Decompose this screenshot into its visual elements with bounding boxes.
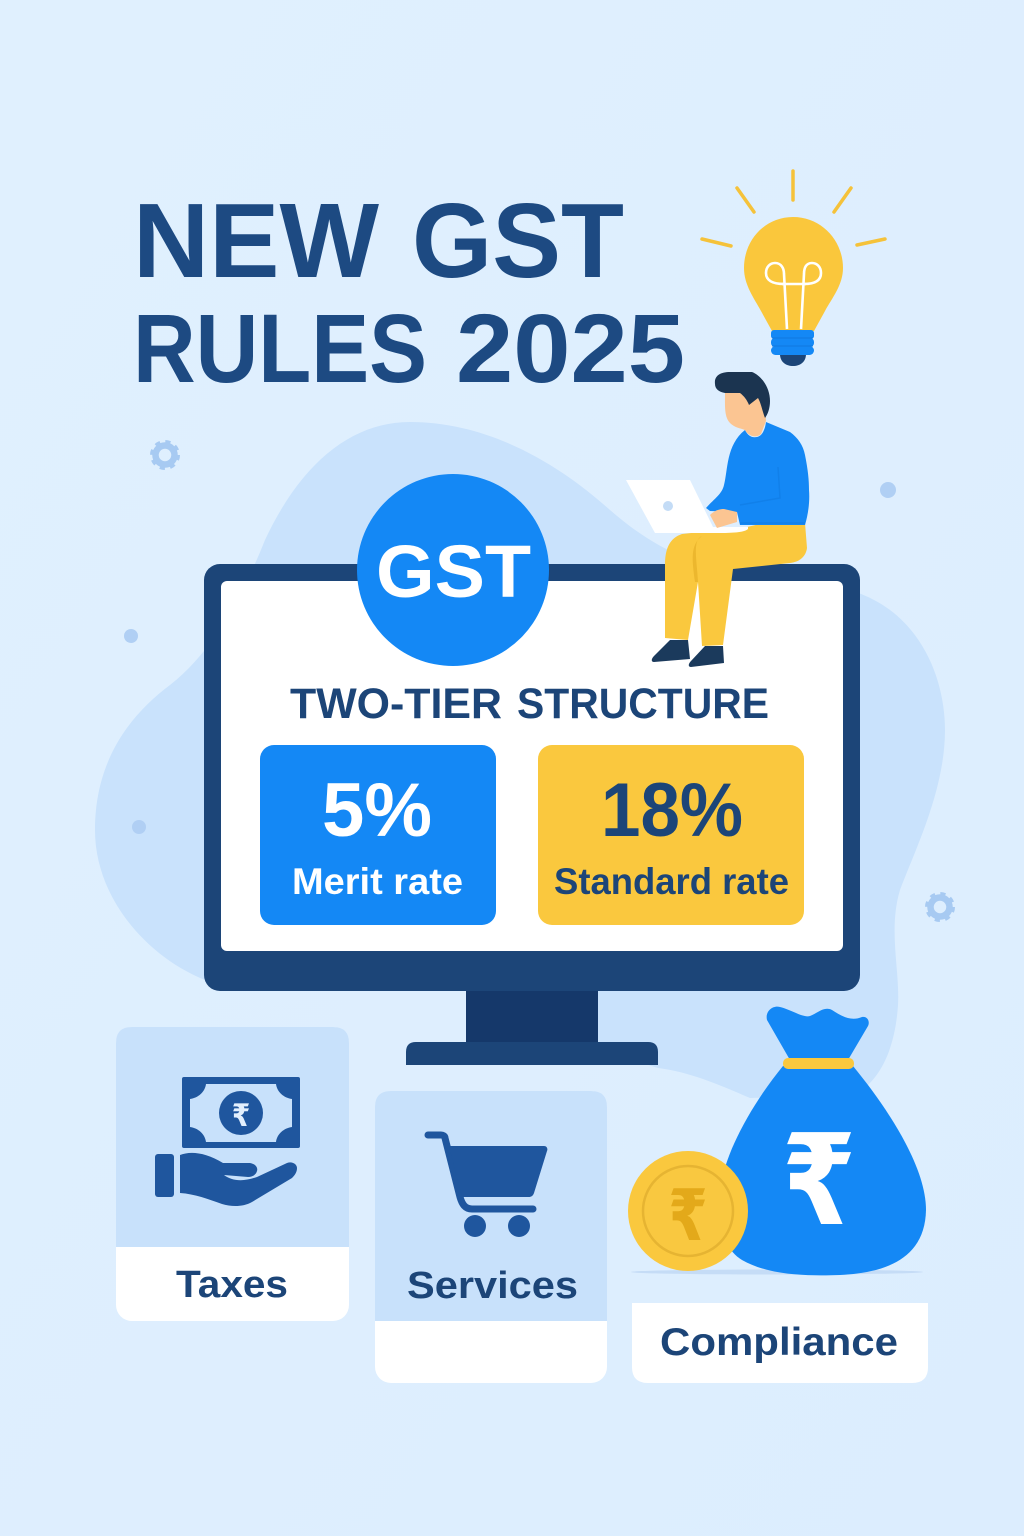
decorative gear left [152,442,178,468]
monitor base [406,1042,658,1065]
panel: 5% merit rate: Merit rate [292,861,463,902]
panel: services [375,1091,607,1383]
heading: two-tier structure [290,680,769,728]
sweater shadow [740,467,805,523]
decorative dots [124,482,896,834]
hand [710,509,737,528]
trousers [665,523,807,646]
title: RULES [133,294,427,403]
panel: compliance label [632,1303,928,1383]
icon: gold coin: ₹ [668,1176,708,1255]
icon: hand holding banknote: ₹ [232,1099,250,1134]
monitor stand [466,985,598,1045]
icon: money bag: ₹ [782,1110,856,1251]
panel: 18% standard rate: Standard rate [554,861,789,902]
panel: compliance illustration [628,1007,926,1275]
title: NEW [133,182,379,300]
monitor [204,564,860,1065]
panel: 18% standard rate [538,745,804,925]
heading: two-tier structure: STRUCTURE [517,680,769,728]
panel: 5% merit rate [260,745,496,925]
sweater [706,422,809,525]
panel: 5% merit rate: 5% [322,768,432,853]
title [133,182,685,403]
person with laptop [626,372,809,667]
icon: shopping cart [428,1135,547,1237]
background blob [95,422,945,1098]
heading: two-tier structure: TWO-TIER [290,680,502,728]
GST badge [357,474,549,666]
icon: light bulb [702,171,885,366]
monitor bezel [204,564,860,991]
panel: services: Services [407,1265,578,1307]
monitor screen [221,581,843,951]
shoes [652,640,724,667]
icon: money bag [719,1007,926,1275]
panel: 18% standard rate: 18% [601,768,743,853]
decorative gear right [927,894,953,920]
title: 2025 [456,294,685,403]
icon: hand holding banknote [155,1077,300,1206]
icon: gold coin [628,1151,748,1271]
GST badge: GST [376,530,531,613]
panel: taxes [116,1027,349,1321]
title: GST [412,182,624,300]
laptop [626,480,748,533]
face [725,391,766,436]
hair [715,372,770,418]
ground shadow [631,1270,923,1274]
panel: compliance label: Compliance [660,1321,898,1364]
panel: taxes: Taxes [176,1264,288,1306]
